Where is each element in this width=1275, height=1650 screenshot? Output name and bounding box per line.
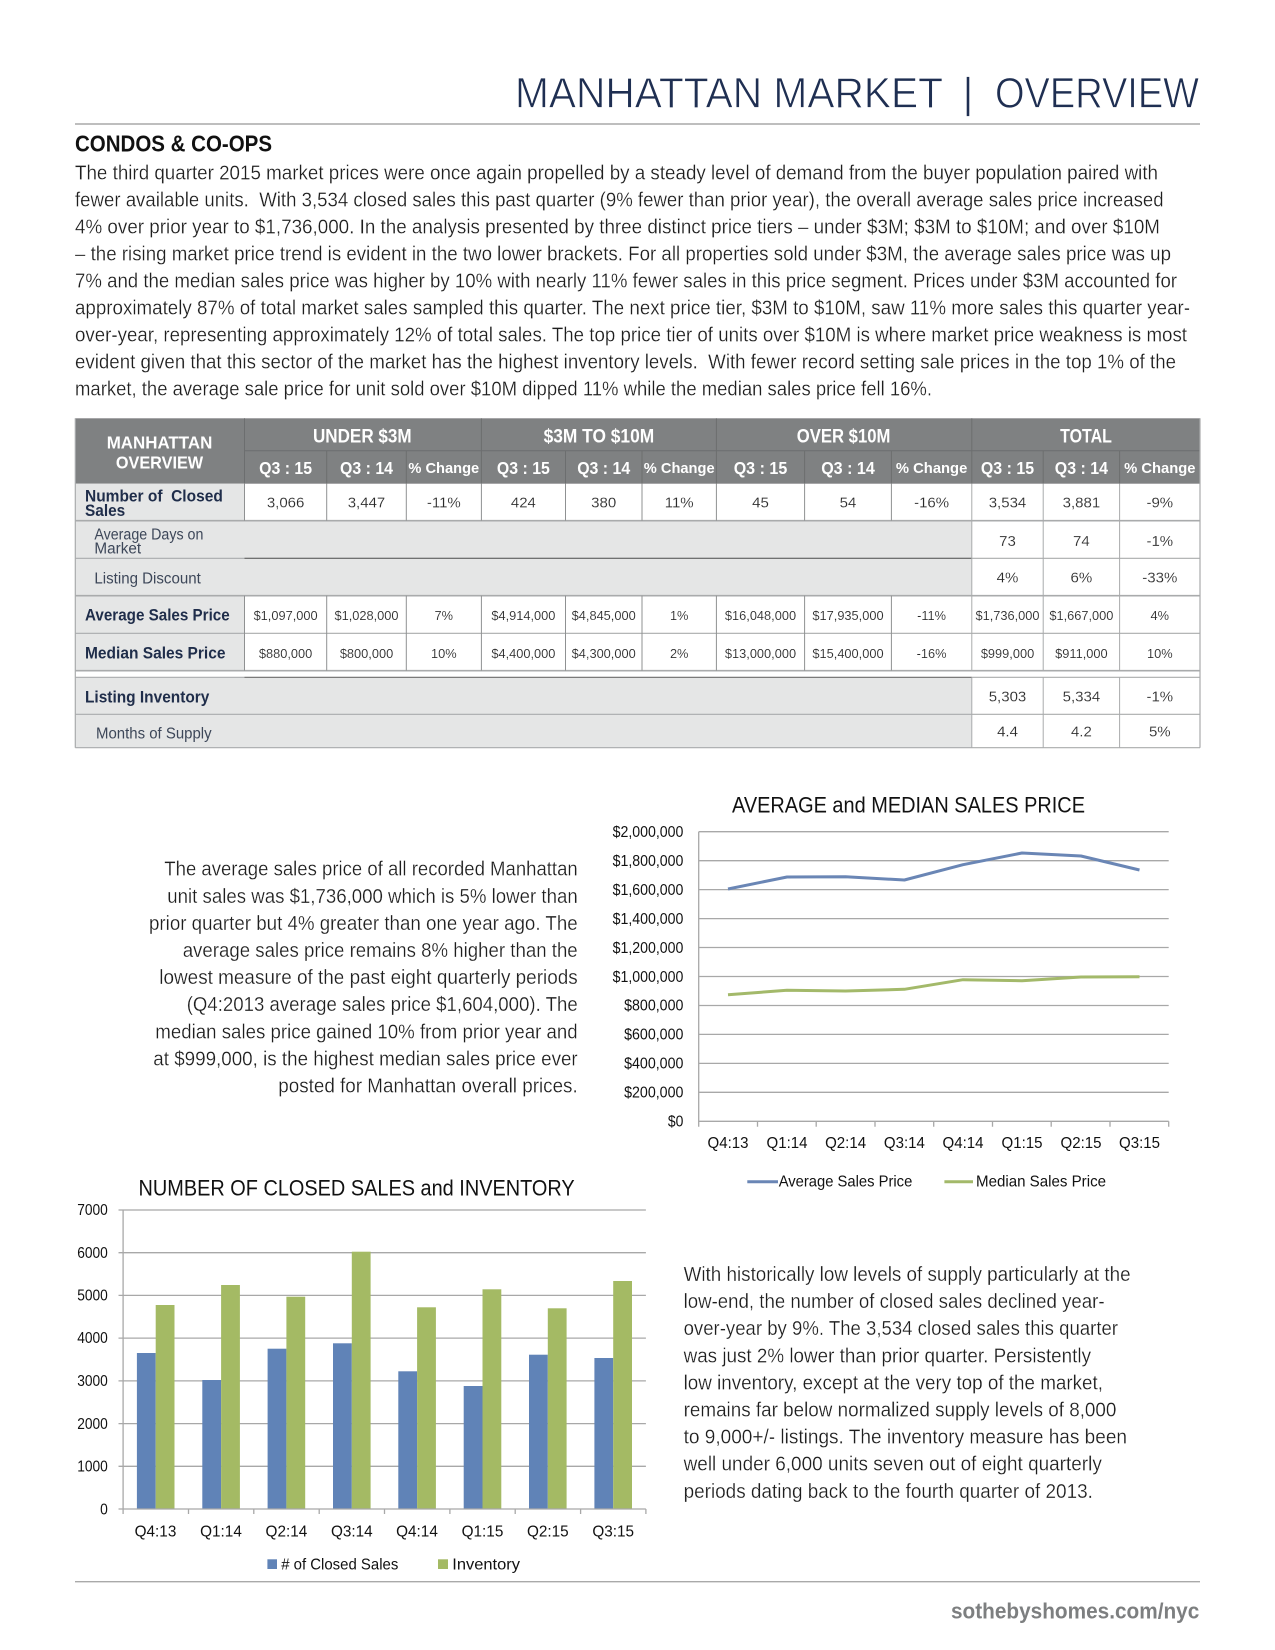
legend [747, 1174, 1106, 1191]
y axis labels: 0 [100, 1502, 108, 1518]
row: months of supply values [997, 724, 1171, 741]
row: number of closed sales values: 3,881 [1063, 495, 1100, 512]
x axis labels: Q1:15 [462, 1524, 503, 1541]
row: listing discount values: -33% [1142, 570, 1177, 587]
row labels: Number of Closed [85, 488, 223, 506]
text block: closed sales commentary: remains far below normalized supply levels of 8,000 [684, 1400, 1116, 1422]
row: number of closed sales values: -16% [914, 495, 949, 512]
table header: % Change [644, 460, 715, 477]
row: months of supply values: 4.2 [1071, 724, 1092, 741]
legend: # of Closed Sales [281, 1556, 398, 1573]
row labels: Median Sales Price [85, 645, 226, 663]
row: number of closed sales values: 3,066 [267, 495, 304, 512]
table header [75, 418, 1200, 484]
row: median sales price values: $4,400,000 [491, 646, 555, 661]
row: listing inventory values: 5,334 [1063, 689, 1100, 706]
x axis labels: Q3:14 [331, 1524, 373, 1541]
x axis labels: Q4:14 [396, 1524, 438, 1541]
row: months of supply values: 5% [1149, 724, 1171, 741]
y axis labels: 1000 [77, 1458, 108, 1476]
y axis labels: $800,000 [624, 998, 683, 1015]
row labels: Sales [85, 502, 125, 520]
table header: TOTAL [1060, 426, 1112, 447]
row: listing inventory values: 5,303 [989, 689, 1026, 706]
text block: closed sales commentary: low inventory, except at the very top of the market, [684, 1372, 1103, 1394]
row: number of closed sales values [267, 495, 1173, 512]
text block: closed sales commentary: low-end, the number of closed sales declined year- [684, 1291, 1105, 1313]
text block: average sales price commentary: unit sales was $1,736,000 which is 5% lower than [167, 886, 578, 908]
row: average sales price values: $4,845,000 [572, 608, 636, 623]
y axis labels: $1,000,000 [613, 969, 683, 986]
table: Manhattan overview [75, 418, 1200, 748]
row: average sales price values: $1,736,000 [975, 608, 1040, 623]
x axis labels: Q3:14 [884, 1135, 925, 1152]
row: months of supply values: 4.4 [997, 724, 1018, 741]
table header: % Change [408, 460, 479, 477]
legend [267, 1556, 520, 1573]
text block: market intro: The third quarter 2015 market prices were once again propelled by a steady level of demand from the buyer population paired with [75, 162, 1158, 184]
text block: average sales price commentary [149, 859, 578, 1098]
row: listing inventory values [989, 689, 1173, 706]
grey label and merged cells [75, 484, 972, 748]
row labels: Months of Supply [96, 725, 212, 742]
text block: closed sales commentary: was just 2% lower than prior quarter. Persistently [683, 1345, 1091, 1367]
y axis labels: 3000 [77, 1373, 108, 1390]
text block: market intro [75, 162, 1190, 400]
row labels [85, 488, 230, 742]
table header: Q3 : 14 [821, 458, 875, 478]
x axis labels [135, 1524, 634, 1541]
row: average days on market values: 74 [1073, 533, 1090, 550]
text block: market intro: 4% over prior year to $1,736,000. In the analysis presented by three distinct price tiers – under $3M; $3M to $10M; and over $10M [75, 216, 1160, 238]
table header: Q3 : 15 [259, 458, 312, 478]
x axis labels: Q2:15 [527, 1524, 569, 1541]
text block: average sales price commentary: lowest measure of the past eight quarterly periods [159, 967, 578, 989]
text block: market intro: 7% and the median sales price was higher by 10% with nearly 11% fewer sales in this price segment. Prices under $3M accounted for [75, 270, 1177, 292]
text block: average sales price commentary: average sales price remains 8% higher than the [183, 940, 578, 962]
x axis labels: Q1:15 [1002, 1135, 1043, 1152]
text block: market intro: fewer available units. With 3,534 closed sales this past quarter (9% fewer than prior year), the overall average sales price increased [75, 190, 1164, 212]
row: number of closed sales values: 54 [840, 495, 856, 512]
row: listing inventory values: -1% [1146, 689, 1173, 706]
row: number of closed sales values: 3,534 [989, 495, 1026, 512]
text block: closed sales commentary [683, 1264, 1131, 1503]
row: median sales price values: $999,000 [981, 646, 1034, 661]
row: number of closed sales values: -9% [1146, 495, 1173, 512]
table header: Q3 : 14 [1055, 458, 1108, 478]
y axis labels [613, 824, 683, 1131]
heading: condos and co-ops: CONDOS & CO-OPS [75, 131, 272, 157]
row: average days on market values [999, 533, 1173, 550]
chart title: NUMBER OF CLOSED SALES and INVENTORY [138, 1176, 575, 1201]
row: number of closed sales values: 380 [591, 495, 616, 512]
bar chart: number of closed sales and inventory [77, 1176, 646, 1573]
table header: Q3 : 14 [340, 458, 393, 478]
title [515, 70, 1199, 118]
chart title: AVERAGE and MEDIAN SALES PRICE [732, 792, 1085, 817]
legend: Average Sales Price [779, 1174, 912, 1191]
row: number of closed sales values: 45 [752, 495, 769, 512]
title: | [962, 70, 974, 118]
text block: market intro: over-year, representing approximately 12% of total sales. The top price tier of units over $10M is where market price weakness is most [75, 324, 1187, 346]
row labels: Market [94, 540, 142, 557]
text block: average sales price commentary: median sales price gained 10% from prior year and [155, 1021, 578, 1043]
row: number of closed sales values: 3,447 [348, 495, 385, 512]
table header: MANHATTAN [107, 432, 212, 452]
row: average sales price values: $1,097,000 [254, 608, 318, 623]
x axis labels [708, 1135, 1160, 1152]
text block: closed sales commentary: over-year by 9%. The 3,534 closed sales this quarter [684, 1318, 1118, 1340]
row: average sales price values: -11% [917, 608, 946, 623]
row: listing discount values: 4% [997, 570, 1018, 587]
median sales price line [728, 977, 1140, 995]
table header: Q3 : 15 [497, 458, 550, 478]
row: average sales price values: $4,914,000 [491, 608, 555, 623]
table header: $3M TO $10M [544, 426, 654, 447]
x axis labels: Q4:14 [942, 1135, 984, 1152]
table header: % Change [1124, 460, 1196, 477]
y axis labels: $1,600,000 [613, 882, 683, 899]
text block: average sales price commentary: at $999,000, is the highest median sales price ever [153, 1048, 578, 1070]
row labels: Average Days on [94, 526, 203, 543]
table header: UNDER $3M [313, 426, 412, 447]
row: average sales price values: $16,048,000 [725, 608, 796, 623]
x axis labels: Q2:14 [266, 1524, 307, 1541]
title: MANHATTAN MARKET [515, 70, 943, 118]
row: median sales price values: $911,000 [1055, 646, 1108, 661]
y axis labels: $1,800,000 [613, 853, 683, 870]
table header: OVER $10M [797, 426, 890, 447]
row: average sales price values: $17,935,000 [812, 608, 884, 623]
x axis labels: Q2:14 [825, 1135, 866, 1152]
table header: % Change [896, 460, 967, 477]
row: average days on market values: -1% [1146, 533, 1173, 550]
row labels: Average Sales Price [85, 607, 230, 625]
row: median sales price values [259, 646, 1173, 661]
row: average days on market values: 73 [999, 533, 1016, 550]
text block: closed sales commentary: well under 6,000 units seven out of eight quarterly [683, 1454, 1102, 1476]
text block: market intro: evident given that this sector of the market has the highest inventory levels. With fewer record setting sale prices in the top 1% of the [75, 352, 1176, 374]
text block: average sales price commentary: posted for Manhattan overall prices. [278, 1076, 578, 1098]
text block: market intro: – the rising market price trend is evident in the two lower brackets. For all properties sold under $3M, the average sales price was up [75, 244, 1171, 266]
table header: Q3 : 14 [577, 458, 630, 478]
x axis labels: Q2:15 [1060, 1135, 1102, 1152]
closed sales bars [137, 1343, 613, 1509]
y axis labels: $0 [668, 1114, 683, 1131]
text block: closed sales commentary: periods dating back to the fourth quarter of 2013. [684, 1481, 1093, 1503]
y axis labels: $1,400,000 [613, 911, 683, 928]
y axis labels: 5000 [77, 1288, 108, 1304]
row: number of closed sales values: 424 [511, 495, 536, 512]
x axis labels: Q4:13 [135, 1524, 176, 1541]
text block: market intro: approximately 87% of total market sales sampled this quarter. The next price tier, $3M to $10M, saw 11% more sales this quarter year- [75, 298, 1190, 320]
row: average sales price values [254, 608, 1169, 623]
y axis labels: 6000 [77, 1245, 108, 1262]
axes [118, 1210, 646, 1514]
table header: OVERVIEW [116, 452, 204, 472]
row: median sales price values: -16% [917, 646, 947, 661]
legend: Inventory [452, 1556, 520, 1573]
table grid lines [75, 418, 1200, 748]
row: average sales price values: 4% [1151, 608, 1169, 623]
x axis labels: Q3:15 [1119, 1135, 1160, 1152]
row: average sales price values: $1,667,000 [1049, 608, 1113, 623]
row: median sales price values: 10% [1147, 646, 1173, 661]
row labels: Listing Inventory [85, 689, 210, 707]
footer url: sothebyshomes.com/nyc [951, 1598, 1199, 1623]
x axis labels: Q4:13 [708, 1135, 749, 1152]
gridlines [118, 1210, 646, 1466]
row: median sales price values: $4,300,000 [572, 646, 636, 661]
y axis labels: 2000 [77, 1416, 108, 1433]
text block: market intro: market, the average sale price for unit sold over $10M dipped 11% while the median sales price fell 16%. [75, 378, 932, 400]
y axis labels: $1,200,000 [613, 940, 683, 957]
inventory bars [156, 1252, 632, 1509]
row: average sales price values: $1,028,000 [334, 608, 399, 623]
title: OVERVIEW [995, 70, 1199, 118]
text block: closed sales commentary: to 9,000+/- listings. The inventory measure has been [684, 1427, 1127, 1449]
line chart: average and median sales price [613, 792, 1169, 1191]
row: median sales price values: 2% [670, 646, 688, 661]
x axis labels: Q1:14 [200, 1524, 242, 1541]
row: median sales price values: 10% [431, 646, 457, 661]
row: number of closed sales values: -11% [427, 495, 461, 512]
y axis labels: $400,000 [624, 1056, 683, 1073]
row: median sales price values: $800,000 [340, 646, 393, 661]
y axis labels: $600,000 [624, 1027, 683, 1044]
y axis labels: $200,000 [624, 1085, 683, 1102]
row: listing discount values [997, 570, 1177, 587]
row: number of closed sales values: 11% [665, 495, 694, 512]
row: median sales price values: $13,000,000 [725, 646, 796, 661]
gridlines and axes [699, 832, 1169, 1127]
y axis labels [77, 1202, 108, 1518]
x axis labels: Q1:14 [766, 1135, 808, 1152]
text block: closed sales commentary: With historically low levels of supply particularly at the [684, 1264, 1131, 1286]
y axis labels: 7000 [77, 1202, 108, 1219]
row: median sales price values: $880,000 [259, 646, 312, 661]
legend: Median Sales Price [976, 1174, 1106, 1191]
row: average sales price values: 1% [670, 608, 688, 623]
x axis labels: Q3:15 [592, 1524, 634, 1541]
row: listing discount values: 6% [1071, 570, 1092, 587]
table header: Q3 : 15 [981, 458, 1034, 478]
average sales price line [728, 853, 1140, 889]
table header: Q3 : 15 [734, 458, 788, 478]
text block: average sales price commentary: prior quarter but 4% greater than one year ago. The [149, 913, 578, 935]
row: median sales price values: $15,400,000 [812, 646, 884, 661]
y axis labels: $2,000,000 [613, 824, 683, 841]
row: average sales price values: 7% [435, 608, 453, 623]
text block: average sales price commentary: The average sales price of all recorded Manhattan [164, 859, 578, 881]
row labels: Listing Discount [94, 570, 201, 587]
text block: average sales price commentary: (Q4:2013 average sales price $1,604,000). The [187, 994, 578, 1016]
y axis labels: 4000 [77, 1330, 108, 1347]
